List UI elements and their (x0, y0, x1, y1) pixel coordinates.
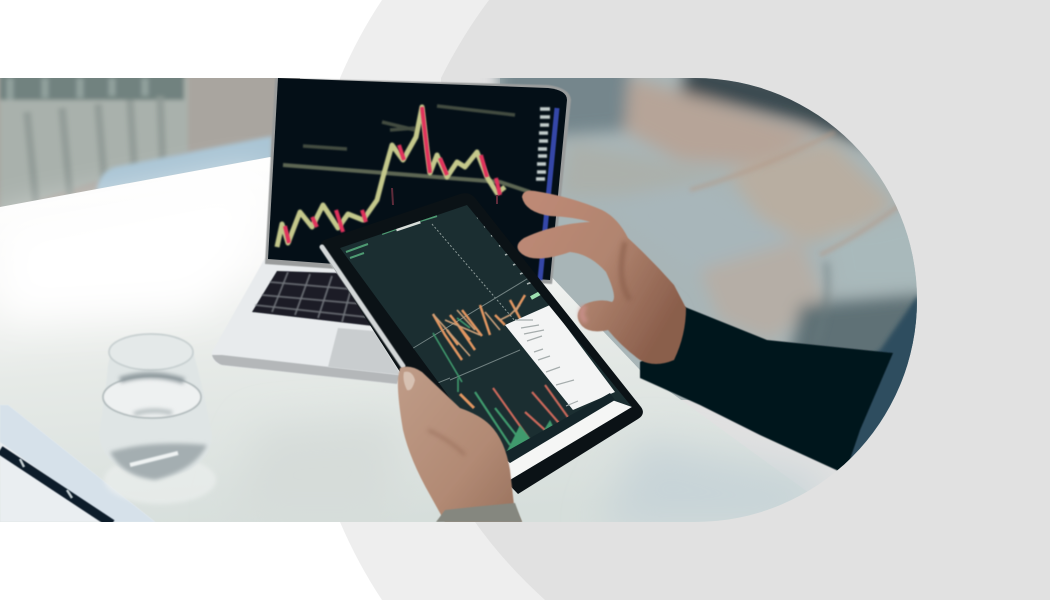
radiator (0, 72, 188, 212)
trackpad (328, 328, 401, 375)
upper hand (517, 191, 686, 364)
bottom toolbar (506, 400, 632, 480)
sleeve and torso (640, 295, 925, 478)
support lines (283, 165, 530, 192)
watch band (436, 503, 522, 522)
table highlights (0, 175, 830, 530)
price line (277, 107, 505, 247)
tablet candles (433, 295, 525, 408)
keyboard (252, 270, 371, 327)
background: light grey curve (340, 0, 1050, 600)
laptop base (212, 259, 399, 384)
tablet volume bars (474, 384, 570, 452)
water glass (99, 334, 216, 504)
tablet silver edge (322, 247, 403, 366)
background: darker grey curve (441, 0, 1050, 600)
top label (396, 221, 420, 229)
tablet screen (340, 205, 632, 480)
lower hand (398, 367, 522, 522)
tablet price scale (476, 217, 531, 285)
photo: clipped rounded image area (0, 60, 960, 530)
blue scale bar (540, 108, 557, 280)
blue sofa strip (97, 136, 272, 192)
sofa (489, 78, 917, 400)
laptop screen (265, 78, 571, 284)
price scale (536, 109, 550, 179)
context menu (505, 305, 615, 410)
crosshair (413, 278, 528, 383)
wall (0, 78, 300, 218)
tablet (320, 190, 650, 494)
pen (0, 450, 112, 524)
notebook (0, 405, 155, 524)
table surface (0, 157, 681, 522)
tablet body (330, 264, 643, 494)
